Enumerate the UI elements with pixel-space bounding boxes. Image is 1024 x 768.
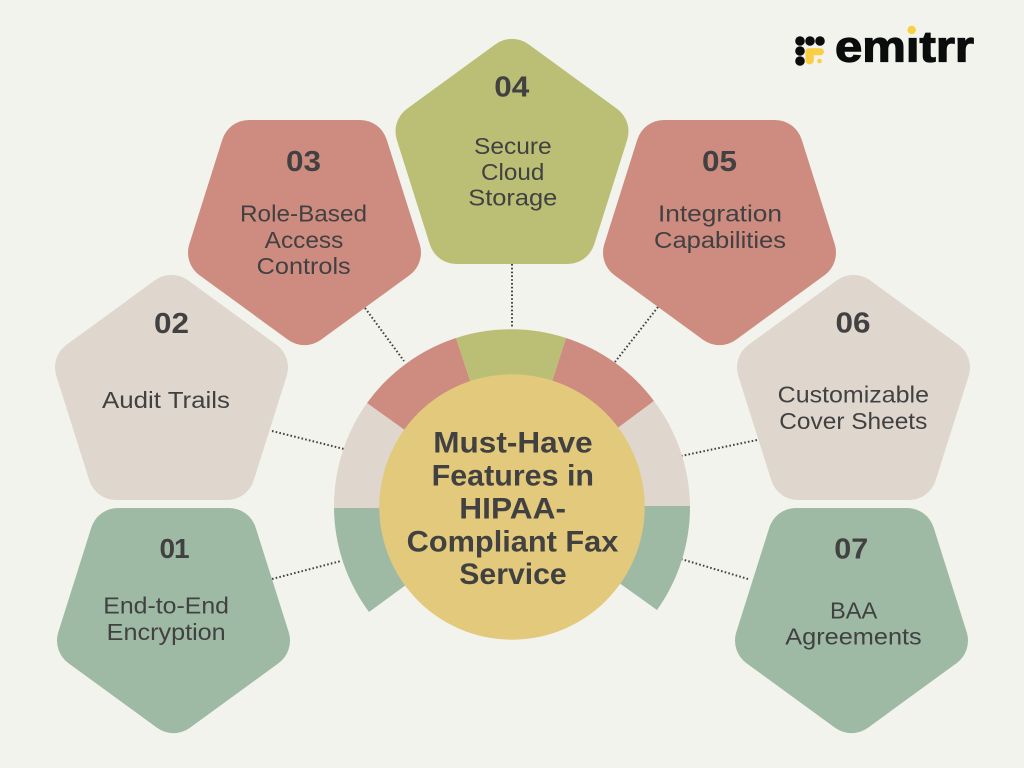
panel: 07 BAA Agreements — [763, 533, 940, 705]
title: Service — [459, 558, 567, 591]
label 06: Cover Sheets — [779, 408, 927, 434]
pentagon 02 — [83, 303, 260, 472]
title: HIPAA- — [459, 492, 566, 526]
number 03: 03 — [286, 146, 321, 178]
label 03: Role-Based — [240, 201, 367, 227]
pentagon 05 — [631, 148, 808, 317]
connector lines — [272, 264, 757, 579]
label 06 — [778, 382, 929, 434]
pentagon 07 — [763, 536, 940, 705]
title — [407, 426, 619, 591]
panel: 06 Customizable Cover Sheets — [765, 303, 942, 472]
panel: 02 Audit Trails — [83, 303, 260, 472]
pentagon 06 — [765, 303, 942, 472]
logo: emitrr — [795, 22, 974, 71]
pentagon 03 — [216, 148, 393, 317]
ring chart segments — [334, 329, 690, 612]
number 06: 06 — [836, 308, 870, 340]
label 05: Capabilities — [654, 227, 786, 253]
label 01 — [103, 592, 229, 645]
number 05: 05 — [702, 146, 737, 178]
label 05 — [654, 201, 786, 253]
number 02: 02 — [154, 308, 189, 340]
title: Must-Have — [433, 426, 593, 460]
label 07: BAA — [830, 597, 878, 623]
number 07: 07 — [834, 533, 868, 565]
number 04: 04 — [494, 72, 529, 104]
logo icon — [795, 36, 825, 66]
label 04: Cloud — [481, 159, 544, 185]
label 04: Storage — [468, 185, 557, 211]
label 03 — [240, 201, 367, 279]
panel: 04 Secure Cloud Storage — [424, 67, 600, 236]
label 01: Encryption — [107, 619, 226, 645]
number 01: 01 — [160, 533, 190, 564]
title: Features in — [432, 460, 594, 492]
label 07 — [785, 597, 922, 650]
logo accent dot — [908, 26, 916, 34]
label 04 — [468, 133, 557, 211]
pentagon 04 — [424, 67, 600, 236]
label 03: Access — [265, 227, 343, 253]
panel: 01 End-to-End Encryption — [85, 533, 262, 705]
label 03: Controls — [257, 253, 351, 279]
label 02: Audit Trails — [102, 387, 230, 413]
logo wordmark: emitrr — [835, 22, 974, 71]
title: Compliant Fax — [407, 526, 619, 558]
label 05: Integration — [658, 201, 782, 227]
panel: 03 Role-Based Access Controls — [216, 146, 393, 317]
label 06: Customizable — [778, 382, 929, 408]
label 04: Secure — [474, 133, 552, 159]
pentagon 01 — [85, 536, 262, 705]
label 07: Agreements — [785, 624, 922, 650]
center circle — [379, 374, 645, 640]
panel: 05 Integration Capabilities — [631, 146, 808, 317]
label 01: End-to-End — [103, 592, 229, 618]
